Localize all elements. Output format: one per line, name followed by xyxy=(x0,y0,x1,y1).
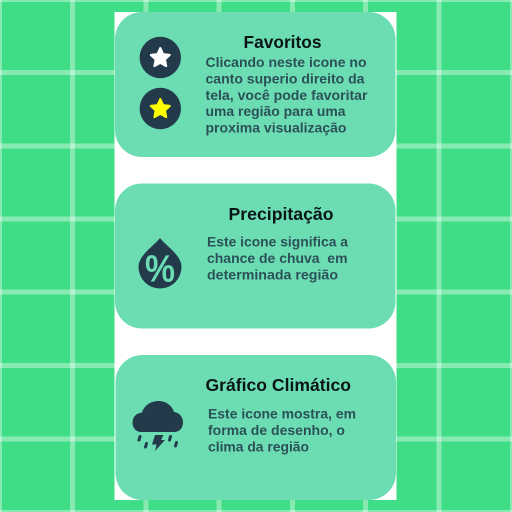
white background panel xyxy=(114,12,396,500)
text block: favoritos description xyxy=(206,54,368,136)
text block: precipitação description: determinada região xyxy=(207,266,338,282)
icon: storm cloud xyxy=(132,401,183,451)
heading: Precipitação: Precipitação xyxy=(228,204,334,224)
text block: favoritos description: uma região para uma xyxy=(206,103,346,119)
text block: gráfico climático description: forma de desenho, o xyxy=(208,422,345,438)
heading: Favoritos: Favoritos xyxy=(244,32,322,52)
text block: favoritos description: Clicando neste icone no xyxy=(206,54,366,70)
text block: favoritos description: tela, você pode favoritar xyxy=(206,87,368,103)
icon: rain drop with percent: % xyxy=(145,248,175,290)
text block: precipitação description: Este icone significa a xyxy=(207,234,348,250)
text block: precipitação description: chance de chuva em xyxy=(207,250,348,266)
text block: precipitação description xyxy=(207,234,348,282)
text block: gráfico climático description: clima da região xyxy=(208,438,309,454)
icon: rain drop with percent xyxy=(138,238,182,290)
text block: favoritos description: proxima visualização xyxy=(206,120,346,136)
text block: favoritos description: canto superio direito da xyxy=(206,70,365,86)
text block: gráfico climático description: Este icone mostra, em xyxy=(208,406,356,422)
icon: yellow star in dark circle xyxy=(140,88,181,129)
panel: precipitação xyxy=(115,184,396,328)
panel: gráfico climático xyxy=(116,355,396,500)
icon: white star in dark circle xyxy=(140,37,181,78)
text block: gráfico climático description xyxy=(208,406,356,454)
heading: Gráfico Climático: Gráfico Climático xyxy=(206,375,351,395)
panel: favoritos xyxy=(115,12,396,157)
